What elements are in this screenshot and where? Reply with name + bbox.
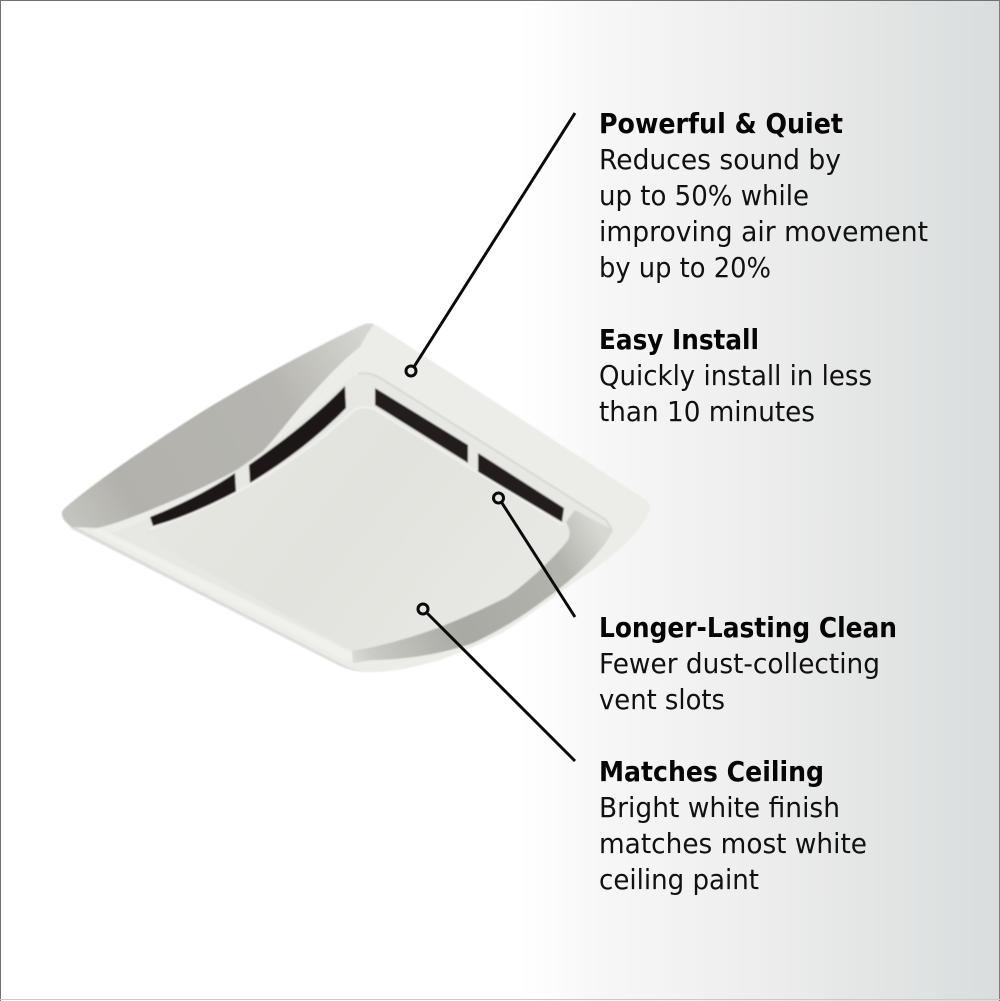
feature text: Powerful and Quiet: Powerful & Quiet <box>599 108 843 140</box>
recessed channel <box>110 374 613 660</box>
feature text: Matches Ceiling: Matches Ceiling <box>599 756 824 788</box>
vent slot 3 <box>375 388 468 463</box>
feature text: Longer-Lasting Clean: Fewer dust-collecting <box>599 648 880 680</box>
grille outer body <box>62 324 650 672</box>
panel edge highlight <box>150 407 563 529</box>
lower-left outer edge shading <box>66 522 373 672</box>
feature text: Powerful and Quiet: Reduces sound by <box>599 144 841 176</box>
feature text: Longer-Lasting Clean: Longer-Lasting Clean <box>599 612 897 644</box>
channel upper edge shadow <box>358 373 612 530</box>
feature text: Powerful and Quiet <box>599 108 928 284</box>
feature text: Easy Install: than 10 minutes <box>599 396 815 428</box>
feature text: Longer-Lasting Clean: vent slots <box>599 684 725 716</box>
shaded recess on lower-right <box>352 510 613 663</box>
curved shaded top-left face <box>62 323 374 528</box>
vent slot 2 <box>249 386 346 483</box>
leader: Longer-Lasting Clean <box>494 493 575 617</box>
feature text: Matches Ceiling: matches most white <box>599 828 867 860</box>
feature text: Powerful and Quiet: by up to 20% <box>599 252 771 284</box>
feature text: Easy Install <box>599 324 872 428</box>
product: ceiling fan grille <box>62 323 650 672</box>
feature text: Easy Install: Quickly install in less <box>599 360 872 392</box>
leader: Powerful and Quiet <box>406 113 575 376</box>
bright rim highlight along lower-left edge <box>92 529 358 661</box>
feature text: Matches Ceiling: ceiling paint <box>599 864 759 896</box>
vent slot 4 <box>478 453 564 522</box>
feature text: Powerful and Quiet: up to 50% while <box>599 180 809 212</box>
feature text: Longer-Lasting Clean <box>599 612 897 716</box>
centre panel <box>146 407 569 650</box>
feature text: Matches Ceiling: Bright white finish <box>599 792 840 824</box>
vent slot 1 <box>150 473 236 526</box>
feature text: Powerful and Quiet: improving air movement <box>599 216 928 248</box>
feature text: Matches Ceiling <box>599 756 867 896</box>
leader: Matches Ceiling <box>418 604 575 761</box>
feature text: Easy Install: Easy Install <box>599 324 759 356</box>
